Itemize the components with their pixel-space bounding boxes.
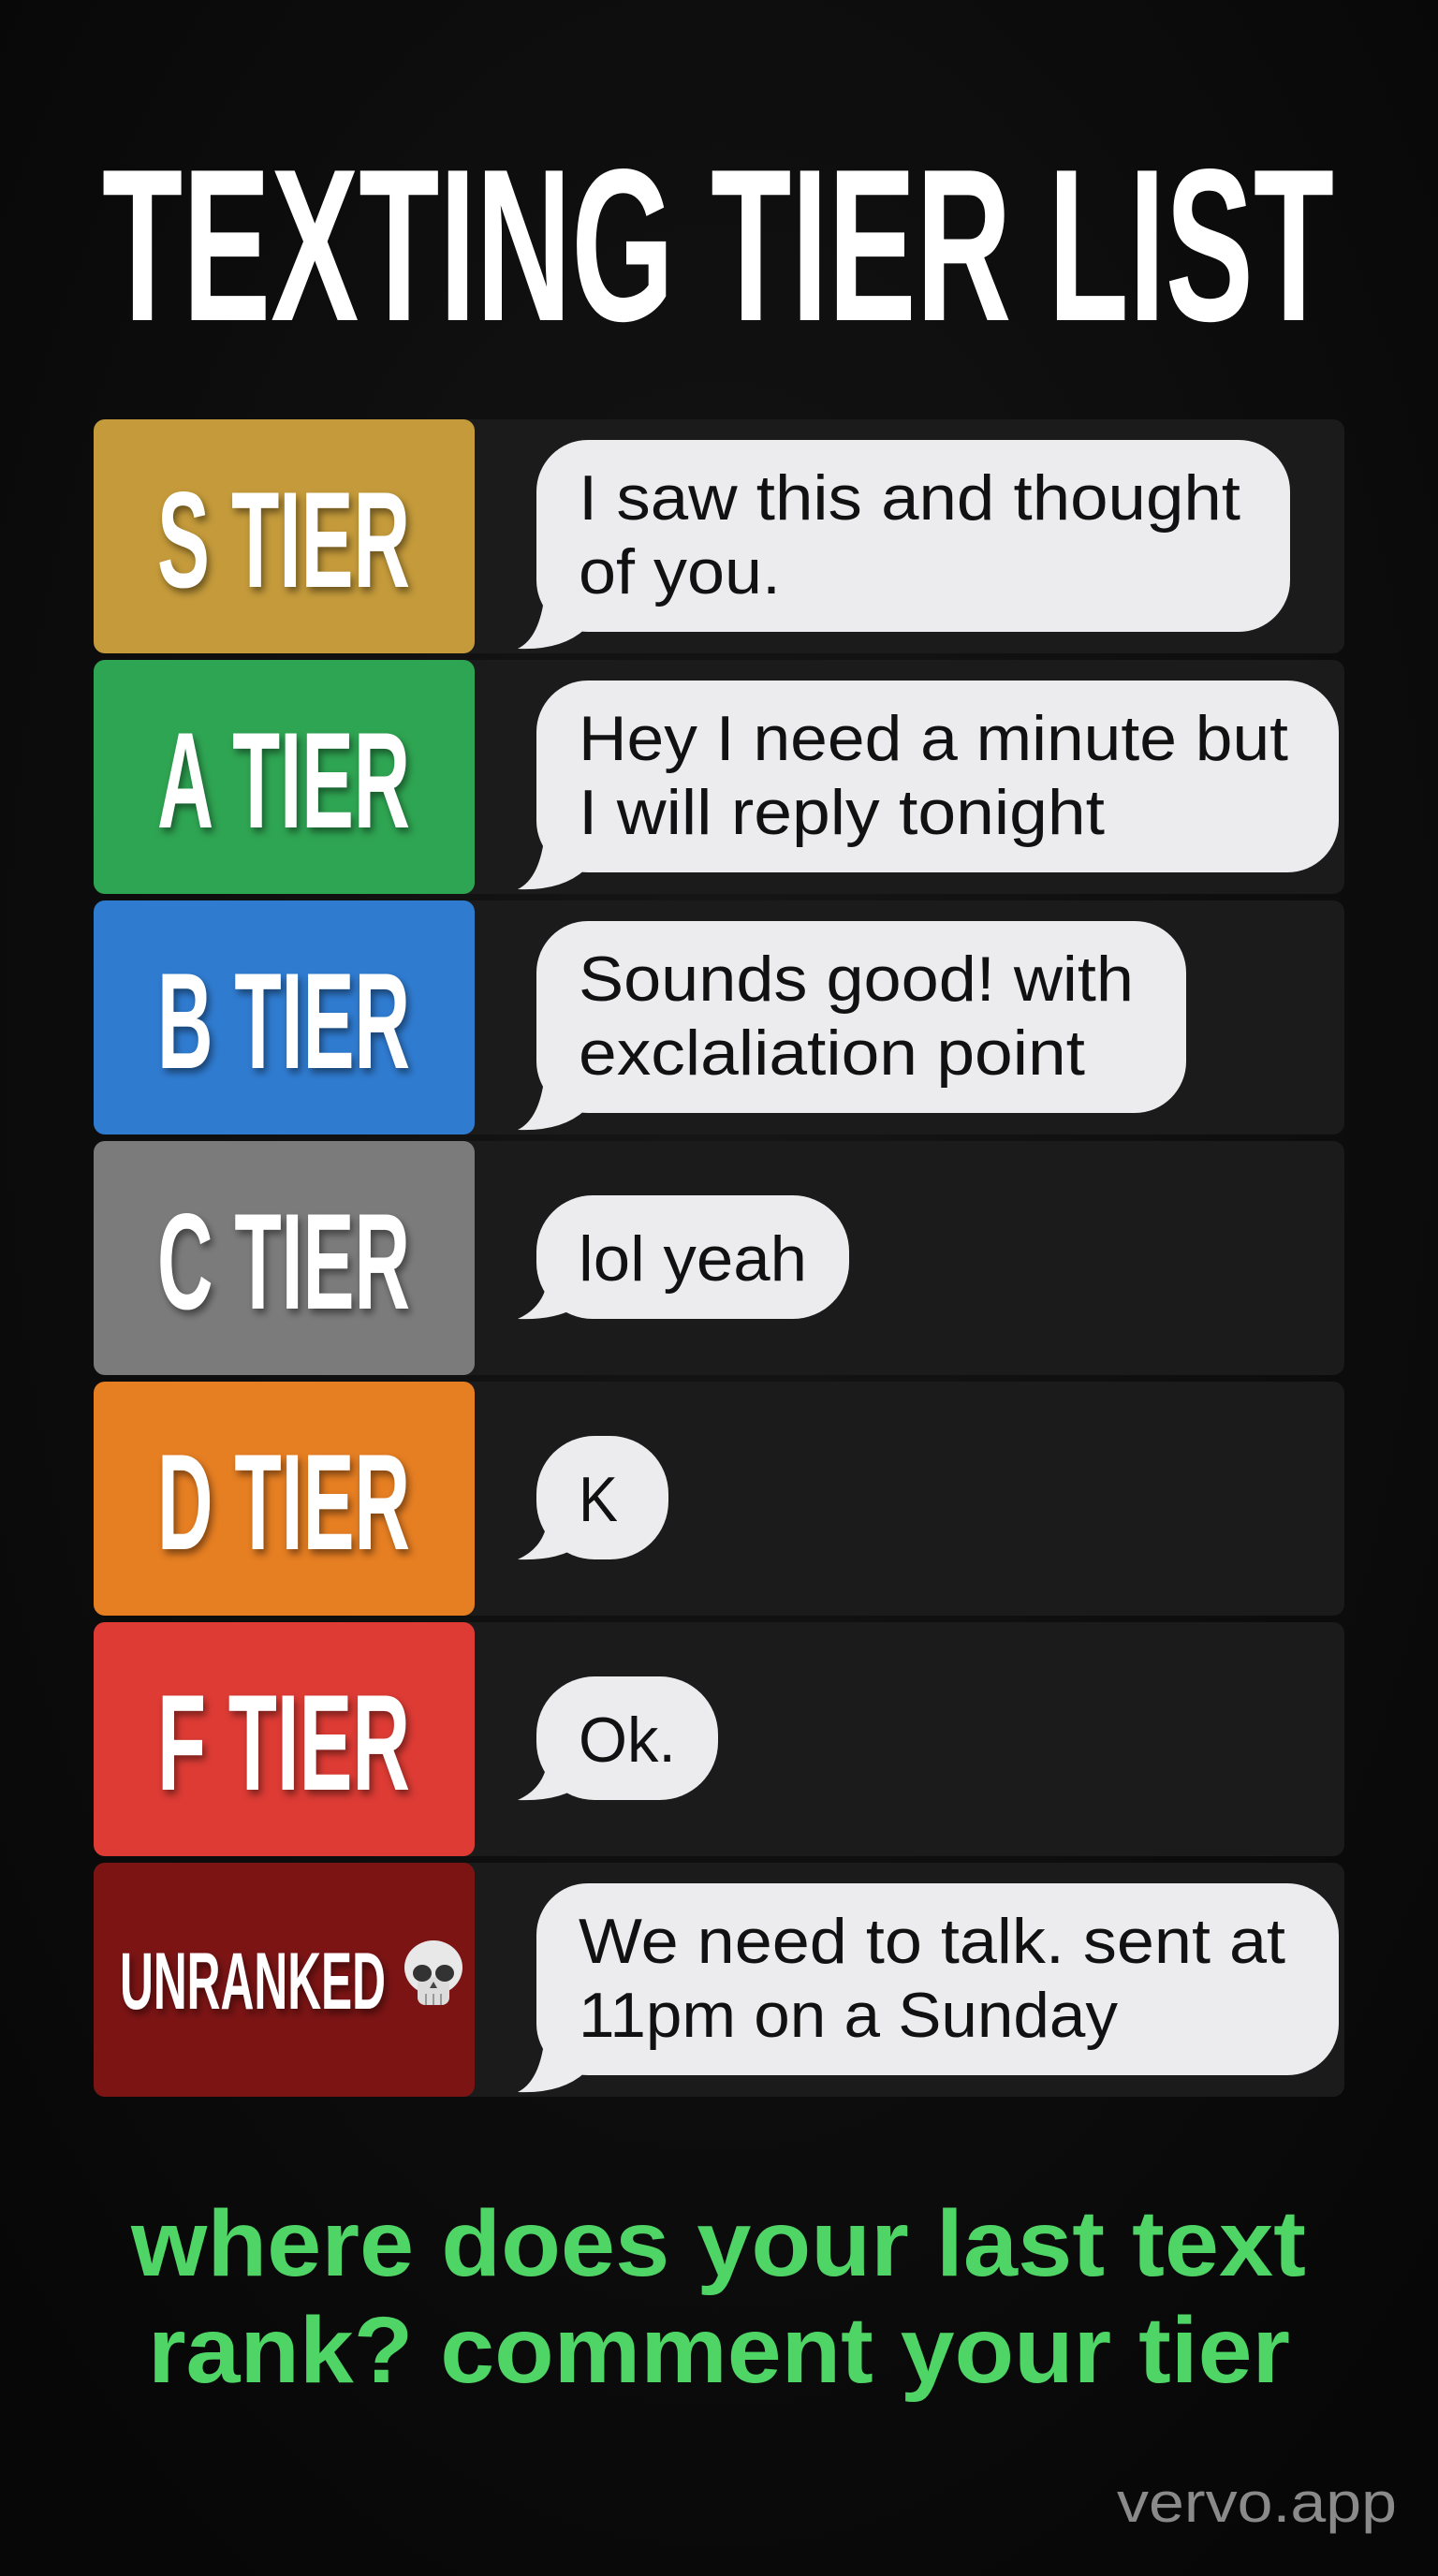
message bubble: B: Sounds good! with: [579, 944, 1134, 1015]
message bubble: S: I saw this and thought: [579, 462, 1240, 534]
message bubble: A: Hey I need a minute but: [579, 703, 1288, 774]
tier row: C: C TIER: [157, 1185, 410, 1338]
tier row: Unranked: UNRANKED: [120, 1937, 386, 2027]
message bubble: C: lol yeah: [579, 1223, 807, 1295]
message bubble: S: [518, 440, 1290, 649]
tier row: S: S TIER: [157, 463, 410, 616]
message bubble: F: Ok.: [579, 1705, 676, 1776]
message bubble: D: [518, 1436, 668, 1559]
tier row: S: [94, 419, 1344, 653]
tier row: C: [94, 1141, 1344, 1375]
tier row: A: [94, 660, 1344, 894]
message bubble: F: [518, 1676, 718, 1800]
tier row: F: [94, 1622, 1344, 1856]
message bubble: B: [518, 921, 1186, 1130]
message bubble: S: of you.: [579, 536, 781, 607]
message bubble: B: exclaliation point: [579, 1017, 1085, 1089]
message bubble: Unranked: We need to talk. sent at: [579, 1906, 1285, 1977]
watermark: vervo.app: [1117, 2471, 1397, 2534]
message bubble: Unranked: [518, 1883, 1339, 2092]
tier row: B: [94, 900, 1344, 1134]
tier row: B: B TIER: [157, 944, 410, 1097]
message bubble: D: K: [579, 1464, 618, 1535]
message bubble: C: [518, 1195, 849, 1319]
call to action: where does your last text: [130, 2191, 1306, 2296]
tier row: Unranked: [94, 1863, 1344, 2097]
tier row: F: F TIER: [157, 1666, 410, 1819]
message bubble: A: [518, 681, 1339, 889]
tier row: D: D TIER: [157, 1426, 410, 1578]
tier row: A: A TIER: [157, 704, 410, 856]
icon: skull: [404, 1940, 462, 2005]
tier row: D: [94, 1382, 1344, 1616]
message bubble: Unranked: 11pm on a Sunday: [579, 1980, 1118, 2051]
message bubble: A: I will reply tonight: [579, 777, 1105, 848]
call to action: rank? comment your tier: [148, 2298, 1290, 2403]
